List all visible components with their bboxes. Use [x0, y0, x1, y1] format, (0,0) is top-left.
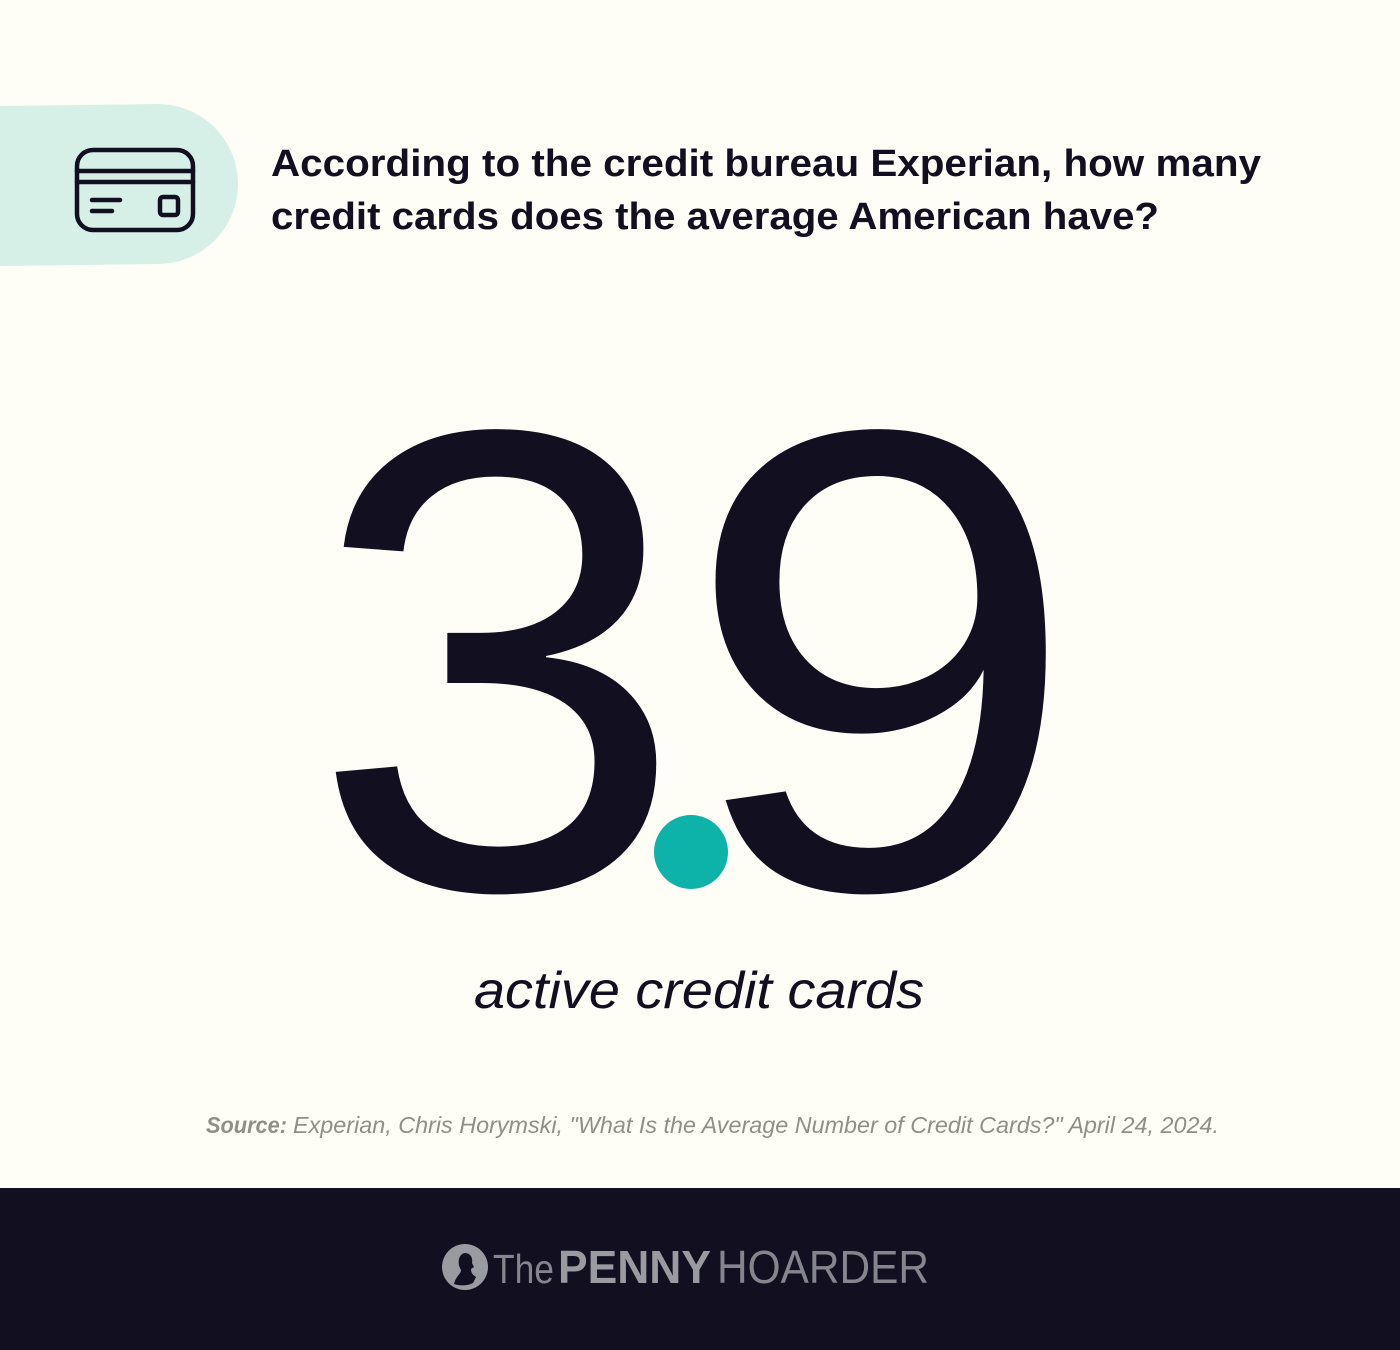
logo: The Penny Hoarder: PENNY	[558, 1241, 711, 1293]
decimal point	[654, 815, 728, 889]
source note: Experian, Chris Horymski, "What Is the Average Number of Credit Cards?" April 24, 2024.	[293, 1112, 1219, 1138]
big number 3.9: 9	[682, 293, 1080, 1028]
big number 3.9: 3	[310, 295, 686, 1028]
icon: credit card	[77, 150, 193, 230]
icon panel: mint tab	[0, 104, 238, 266]
footer band	[0, 1188, 1400, 1350]
logo: The Penny Hoarder	[442, 1241, 929, 1293]
source note: Source:	[206, 1112, 287, 1138]
title	[271, 143, 1261, 238]
big number 3.9	[310, 293, 1080, 1028]
subtitle: active credit cards: active credit cards	[474, 962, 924, 1020]
title: According to the credit bureau Experian, how many	[271, 143, 1261, 185]
icon: penny portrait	[442, 1244, 488, 1290]
logo: The Penny Hoarder: The	[493, 1246, 554, 1292]
logo: The Penny Hoarder: HOARDER	[717, 1241, 929, 1293]
title: credit cards does the average American have?	[271, 196, 1159, 238]
